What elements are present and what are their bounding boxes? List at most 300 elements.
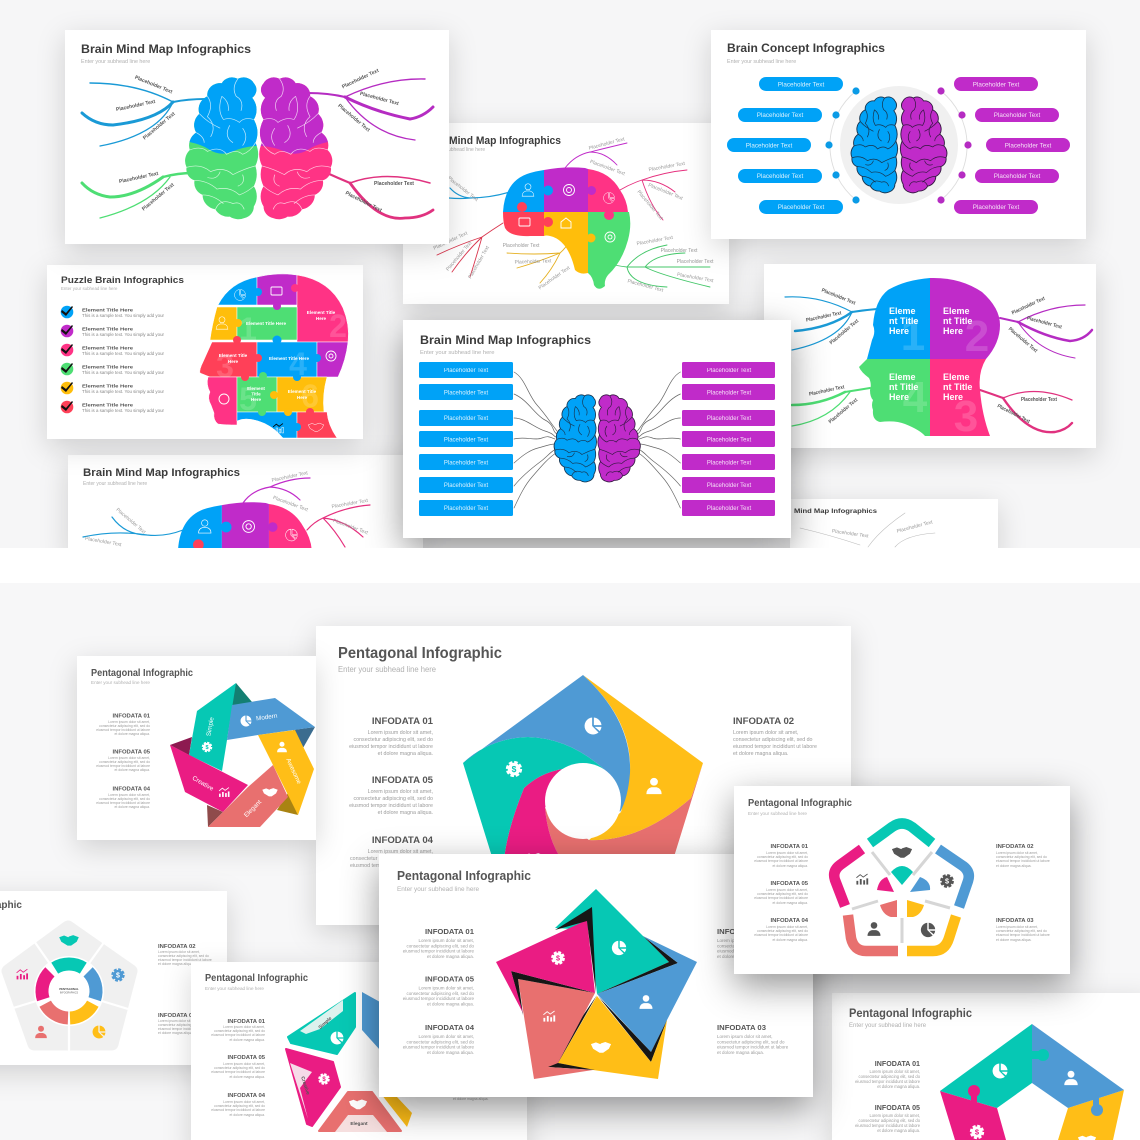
branch labels: Placeholder Text [84,536,122,548]
purple boxes [682,362,775,516]
puzzle digits: 6 [301,378,319,414]
text group 01: INFODATA 01 [875,1060,920,1068]
branch labels: Placeholder Text [996,403,1031,425]
text group 05: eiusmod tempor incididunt ut labore [754,896,808,900]
head text: Eleme [889,306,916,316]
text group 01: et dolore magna aliqua. [115,732,150,736]
branch labels: Placeholder Text [1026,315,1063,331]
text group 01 [349,716,434,757]
overlapping pentagon [496,889,697,1079]
branches [437,143,710,287]
branches: pink [327,173,433,218]
pink piece [286,1049,340,1126]
blue boxes: Placeholder Text [444,438,488,444]
text group 01: consectetur adipiscing elit, sed do [354,737,433,743]
text group 04: INFODATA 04 [112,786,151,792]
slide: cropped mind map far right [790,499,998,559]
text group 01: consectetur adipiscing elit, sed do [859,1074,921,1079]
puzzle element labels: Here [316,316,327,321]
text group 02: consectetur adipiscing elit, sed do [158,954,209,958]
text group 05: Lorem ipsum dolor sit amet, [418,986,474,990]
checklist: Element Title Here [82,384,133,390]
text group 05: eiusmod tempor incididunt ut labore [96,764,150,768]
text group 05: consectetur adipiscing elit, sed do [354,796,433,802]
subhead: Enter your subhead line here [91,680,150,685]
text group 02: INFODATA 02 [158,944,196,950]
branch labels: Placeholder Text [115,507,147,536]
text group 04: INFODATA 04 [425,1023,475,1032]
text group 05: consectetur adipiscing elit, sed do [757,892,808,896]
right pills: Placeholder Text [973,82,1019,88]
head text: Here [889,392,909,402]
pink piece: $ [322,1077,326,1083]
brain: right hemisphere [259,77,332,219]
branch labels: Placeholder Text [1011,296,1046,316]
text group 01: INFODATA 01 [112,714,151,720]
pentagon icons [856,847,953,937]
blue boxes: Placeholder Text [444,483,488,489]
branch labels: Placeholder Text [806,310,842,324]
text group 03: consectetur adipiscing elit, sed do [717,1040,785,1044]
pentagon icons [612,941,626,955]
ribbon icons: $ [205,745,209,751]
pink piece: Creative [299,1076,311,1096]
text group 05: eiusmod tempor incididunt ut labore [349,803,433,809]
puzzle digits: 5 [239,381,257,417]
slide: jigsaw pentagon [832,993,1140,1140]
ribbon labels: Simple [205,716,216,737]
right pills: Placeholder Text [1005,142,1051,150]
left pills [727,77,860,214]
text group 05: eiusmod tempor incididunt ut labore [403,996,474,1001]
text group 01: INFODATA 01 [372,716,434,727]
text group 01: et dolore magna aliqua. [773,864,808,868]
text group 03: eiusmod tempor incididunt ut labore [717,1044,789,1050]
slide: puzzle brain mind map [403,123,729,304]
ribbon labels: Awesome [284,757,303,786]
text group 01: eiusmod tempor incididunt ut labore [96,728,150,732]
text group 04: et dolore magna aliqua. [773,938,808,942]
head digits: 3 [954,392,978,441]
slide: puzzle brain head [47,265,363,439]
slide: large spiral pentagon [316,626,851,925]
text group 03: et dolore magna aliqua. [717,1050,764,1055]
text group 04 [403,1023,475,1055]
head: pink quadrant [930,359,990,436]
branch labels: Placeholder Text [538,265,572,291]
branch labels: Placeholder Text [676,272,714,284]
branch labels: Placeholder Text [433,230,469,252]
text group 03: Lorem ipsum dolor sit amet, [717,1034,773,1039]
branch labels: Placeholder Text [119,171,159,185]
text group 01: consectetur adipiscing elit, sed do [99,724,150,728]
left pills: Placeholder Text [757,112,803,119]
text group 04: consectetur adipiscing elit, sed do [99,797,150,801]
text group 02: INFODATA 02 [717,927,766,936]
text group 05: et dolore magna aliqua. [230,1075,265,1079]
branch labels [84,470,369,548]
subhead: Enter your subhead line here [61,286,118,291]
text group 04 [754,918,809,942]
puzzle element labels: Element Title [288,389,317,394]
text group 05: Lorem ipsum dolor sit amet, [766,888,808,892]
branch labels: Placeholder Text [809,384,845,398]
text group 01: consectetur adipiscing elit, sed do [214,1029,265,1033]
slide title: Pentagonal Infographic [91,668,193,679]
branches: green [82,173,193,218]
checklist: Element Title Here [82,326,133,332]
branch labels: Placeholder Text [446,175,479,203]
head digits [901,311,989,441]
text group 03: INFODATA 03 [996,918,1034,924]
text group 01: INFODATA 01 [425,927,475,936]
slide title: Brain Mind Map Infographics [81,42,251,56]
slide title: Pentagonal Infographic [338,645,502,662]
slide: center shadowed pentagon [379,854,813,1097]
slide: brain mind map cropped lower [68,455,423,632]
partially hidden text: et dolore magna aliqua. [453,1097,488,1101]
blue boxes [419,362,513,516]
branch labels [116,68,414,214]
text group 05: INFODATA 05 [875,1104,920,1112]
gray pentagon: $ [116,972,120,979]
puzzle digits [216,308,347,417]
text group 01: eiusmod tempor incididunt ut labore [754,859,808,863]
text group 01: eiusmod tempor incididunt ut labore [403,948,474,954]
text group 01: INFODATA 01 [227,1019,266,1025]
text group 02: et dolore magna aliqua. [996,864,1031,868]
text group 01: INFODATA 01 [770,844,809,850]
branch labels: Placeholder Text [677,259,714,265]
slide: cropped mind map far right: Placeholder Text [831,528,869,540]
text group 02: et dolore magna aliqua. [733,751,788,757]
text group 04: et dolore magna aliqua. [427,1050,474,1055]
right pills: Placeholder Text [994,112,1040,119]
branch labels: Placeholder Text [271,470,309,484]
text group 05: et dolore magna aliqua. [378,810,433,816]
puzzle element labels: Here [297,395,308,400]
text group 03 [158,1013,212,1035]
text group 03: Lorem ipsum dolor sit amet, [996,925,1038,929]
white separator band [0,548,1140,583]
head digits: 1 [901,311,925,360]
blue boxes: Placeholder Text [444,506,488,512]
checklist [61,306,165,413]
text group 03: et dolore magna aliqua. [158,1031,193,1035]
branch labels [433,136,714,294]
subhead: Enter your subhead line here [849,1023,927,1029]
text group 05: INFODATA 05 [112,750,151,756]
text group 04: consectetur [350,856,378,862]
branch labels: Placeholder Text [142,111,177,141]
ribbon labels: Creative [191,775,215,793]
branch labels: Placeholder Text [647,182,684,202]
slide title: Brain Mind Map Infographics [83,467,240,479]
background: upper panel [0,0,1140,548]
branches [785,297,1092,432]
branch labels: Placeholder Text [636,189,664,222]
puzzle element labels: Element Title [307,310,336,315]
branch labels: Placeholder Text [272,495,309,513]
icon: pie [585,718,602,734]
text group 05: INFODATA 05 [227,1055,266,1061]
text group 04: Lorem ipsum dolor sit amet, [223,1100,265,1104]
text group 05: consectetur adipiscing elit, sed do [406,991,474,996]
puzzle element labels: Element [247,386,265,391]
slide: four part head mind map [764,264,1096,448]
branch labels: Placeholder Text [648,161,686,173]
text group 02: eiusmod tempor incididunt ut labore [717,948,789,954]
brain: blue hemisphere [851,97,898,193]
text group 05: INFODATA 05 [425,974,475,984]
right pills: Placeholder Text [973,204,1019,211]
head text: nt Title [889,382,918,392]
branch labels: Placeholder Text [341,68,380,90]
brain: purple hemisphere [598,395,640,482]
text group 05: Lorem ipsum dolor sit amet, [108,756,150,760]
subhead: Enter your subhead line here [421,147,485,153]
slide title: Brain Mind Map Infographics [420,333,591,347]
branch labels: Placeholder Text [134,75,173,95]
puzzle element labels: Title [251,392,261,396]
connector wires left [514,372,557,508]
text group 02: consectetur adipiscing elit, sed do [717,944,785,948]
subhead: Enter your subhead line here [81,59,150,65]
pentagon icons [59,935,79,946]
pentagon icons: $ [945,877,949,886]
branch labels: Placeholder Text [636,235,674,247]
slide: rounded pentagon outline [734,786,1070,974]
ribbon labels: Elegant [243,799,263,819]
text group 05: eiusmod tempor incididunt ut labore [211,1070,265,1074]
text group 05: consectetur adipiscing elit, sed do [859,1118,921,1123]
text group 01: eiusmod tempor incididunt ut labore [855,1079,921,1084]
subhead: Enter your subhead line here [727,59,796,65]
head digits: 4 [903,373,928,422]
slide title: Mind Map Infographics [449,135,561,147]
text group 01 [403,927,475,959]
text group 04: et dolore magna aliqua. [230,1113,265,1117]
text group 01: Lorem ipsum dolor sit amet, [766,851,808,855]
text group 05: consectetur adipiscing elit, sed do [214,1066,265,1070]
puzzle element labels: Element Title [219,353,248,358]
branch labels: Placeholder Text [445,240,474,272]
checklist: This is a sample text. You simply add your [82,313,165,318]
purple boxes: Placeholder Text [707,438,751,444]
branch labels: Placeholder Text [359,91,400,107]
text group 01 [96,714,151,736]
purple boxes: Placeholder Text [707,460,751,466]
ribbon pentagon [170,683,315,827]
puzzle element labels [219,310,336,402]
text group 02 [733,716,817,757]
puzzle element labels: Element Title Here [269,356,309,361]
slide: ribbon pentagon [77,656,316,840]
head text [889,306,972,402]
salmon piece [319,1092,401,1132]
salmon piece: Elegant [350,1121,368,1127]
checklist: This is a sample text. You simply add your [82,370,165,375]
puzzle icons [216,287,336,433]
jigsaw icons [971,1064,1096,1140]
blue boxes: Placeholder Text [444,368,488,374]
branch labels: Placeholder Text [588,136,626,152]
slide: cropped mind map far right: Mind Map Infographics [794,508,877,515]
right pills: Placeholder Text [994,173,1040,180]
slide: triangle pieces pentagon [191,962,527,1140]
text group 05: INFODATA 05 [372,775,434,786]
branch labels [806,288,1063,425]
text group 01: consectetur adipiscing elit, sed do [757,855,808,859]
branch labels: Placeholder Text [661,248,698,254]
text group 05: consectetur adipiscing elit, sed do [99,760,150,764]
text group 04: consectetur adipiscing elit, sed do [406,1040,474,1044]
text group 01: Lorem ipsum dolor sit amet, [869,1069,920,1074]
slide: brain mind map with boxes [403,320,791,538]
text group 05 [855,1104,921,1133]
head text: Eleme [943,372,970,382]
brain backdrop and ring [830,86,967,204]
mind map branches [83,478,370,547]
blue boxes: Placeholder Text [444,416,488,422]
subhead: Enter your subhead line here [205,986,264,991]
text group 01: eiusmod tempor incididunt ut labore [349,744,433,750]
text group 01 [855,1060,921,1089]
branches: blue [82,83,205,146]
text group 05: Lorem ipsum dolor sit amet, [223,1062,265,1066]
text group 03: eiusmod tempor incididunt ut labore [996,933,1050,937]
puzzle digits: 3 [216,348,234,384]
text group 03: INFODATA 03 [717,1023,766,1032]
text group 03: consectetur adipiscing elit, sed do [996,929,1047,933]
slide title: Pentagonal Infographic [849,1006,972,1020]
branch labels: Placeholder Text [141,182,176,212]
text group 03: eiusmod tempor incididunt ut labore [158,1027,212,1031]
checklist: Element Title Here [82,402,133,408]
slide title: Pentagonal Infographic [205,973,308,984]
text group 01: Lorem ipsum dolor sit amet, [368,730,433,736]
text group 04 [211,1093,266,1117]
text group 02: eiusmod tempor incididunt ut labore [158,958,212,962]
head text: Eleme [943,306,970,316]
text group 05: et dolore magna aliqua. [427,1002,474,1006]
puzzle digits: 2 [329,308,347,344]
yellow piece [378,1090,412,1127]
text group 02 [996,844,1050,868]
checklist: This is a sample text. You simply add your [82,389,165,394]
branch labels: Placeholder Text [336,103,371,134]
jigsaw icons: $ [975,1128,980,1137]
right pills [937,77,1070,214]
text group 02: eiusmod tempor incididunt ut labore [996,859,1050,863]
connector wires right [637,372,680,508]
puzzle brain [178,502,314,632]
purple boxes: Placeholder Text [707,483,751,489]
text group 04: et dolore magna aliqua. [115,805,150,809]
checklist: This is a sample text. You simply add your [82,351,165,356]
purple boxes: Placeholder Text [707,368,751,374]
text group 05: Lorem ipsum dolor sit amet, [368,789,433,795]
branch labels: Placeholder Text [344,190,383,214]
slide: brain concept [711,30,1086,239]
checklist: Element Title Here [82,346,133,352]
head text: Eleme [889,372,916,382]
overlapping pentagon: $ [556,954,560,963]
text group 05 [754,881,809,905]
text group 01: consectetur adipiscing elit, sed do [406,944,474,948]
left pills: Placeholder Text [746,142,792,150]
text group 02: INFODATA 02 [733,716,794,727]
text group 01: Lorem ipsum dolor sit amet, [418,938,474,943]
text group 04: eiusmod tempor incididunt ut labore [211,1108,265,1112]
text group 02: Lorem ipsum dolor sit amet, [158,950,200,954]
text group 03: consectetur adipiscing elit, sed do [158,1023,209,1027]
left pills: Placeholder Text [778,82,824,88]
branch labels: Placeholder Text [514,258,552,266]
purple boxes: Placeholder Text [707,416,751,422]
text group 03 [996,918,1050,942]
text group 04: eiusmod temp [350,863,383,869]
puzzle digits: 1 [239,311,257,347]
text group 02: eiusmod tempor incididunt ut labore [733,744,817,750]
brain: purple hemisphere [900,97,947,193]
head text: Here [943,392,963,402]
checklist: Element Title Here [82,308,133,314]
text group 01: eiusmod tempor incididunt ut labore [211,1033,265,1037]
text group 03: Lorem ipsum dolor sit amet, [158,1019,200,1023]
blue boxes: Placeholder Text [444,390,488,396]
subhead: Enter your subhead line here [338,665,437,674]
slide: gray pentagon with ring [0,891,227,1065]
blue piece [362,992,380,1050]
ribbon labels: Modern [256,712,278,722]
ring segments [42,964,96,1018]
icon: person [646,778,662,794]
text group 05 [349,775,434,816]
head text: Here [943,326,963,336]
text group 04 [96,786,151,809]
text group 05 [403,974,475,1006]
blue boxes: Placeholder Text [444,460,488,466]
text group 04: eiusmod tempor incididunt ut labore [96,801,150,805]
text group 02: Lorem ipsum dolor sit amet, [717,938,773,943]
ribbon icons [202,716,287,797]
head: green quadrant [859,359,930,436]
text group 04: consectetur adipiscing elit, sed do [757,929,808,933]
brain: blue hemisphere [554,395,596,482]
text group 05 [96,750,151,772]
text group 04: eiusmod tempor incididunt ut labore [754,933,808,937]
inner core segments [877,866,930,917]
slide: brain mind map main [65,30,449,244]
text group 05: INFODATA 05 [770,881,809,887]
text group 05 [211,1055,266,1079]
text group 03: INFODATA 03 [158,1013,196,1019]
branch labels: Placeholder Text [332,518,369,536]
text group 04: Lorem ipsum dolor sit amet, [368,849,433,855]
text group 02: INFODATA 02 [996,844,1034,850]
branch labels: Placeholder Text [467,245,491,280]
puzzle digits: 4 [289,346,307,382]
text group 02: consectetur adipiscing elit, sed do [996,855,1047,859]
branch labels: Placeholder Text [1007,326,1039,354]
left pills: Placeholder Text [778,204,824,211]
text group 01: et dolore magna aliqua. [427,954,474,959]
branch labels: Placeholder Text [116,99,156,113]
text group 02: Lorem ipsum dolor sit amet, [996,851,1038,855]
slide title: Pentagonal Infographic [748,798,852,809]
head text: nt Title [943,316,972,326]
